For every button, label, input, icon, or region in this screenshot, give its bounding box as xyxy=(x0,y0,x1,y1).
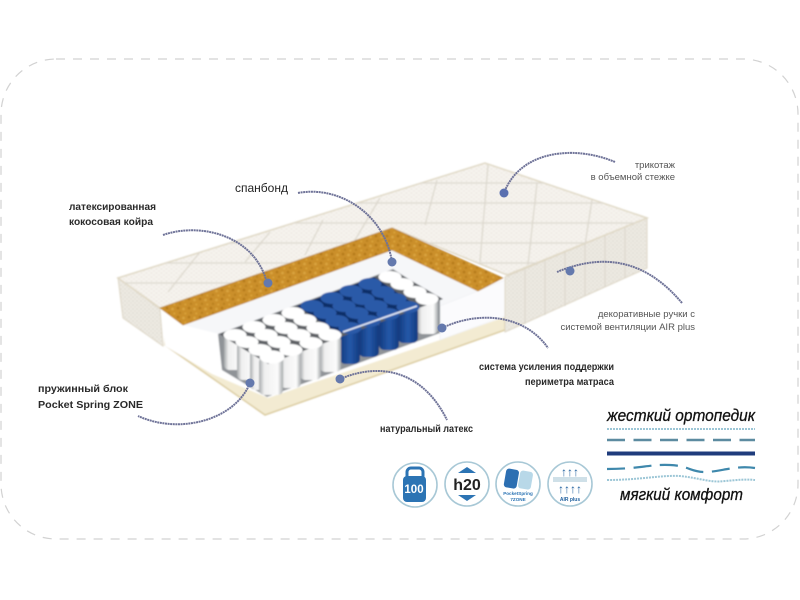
label: latex coir: латексированная xyxy=(69,201,156,213)
icon: pocket spring: PocketSpring xyxy=(503,491,533,496)
front row of springs xyxy=(259,299,438,395)
icon: pocket spring: 7ZONE xyxy=(510,497,526,502)
label: latex coir: кокосовая койра xyxy=(69,216,153,228)
white foam perimeter and interior xyxy=(161,242,505,398)
label: perimeter support: периметра матраса xyxy=(525,377,614,388)
left row of springs xyxy=(224,335,270,390)
foam shading xyxy=(183,250,478,334)
icon: pocket spring xyxy=(496,462,540,506)
spring block top surface xyxy=(219,270,443,364)
spring block frame xyxy=(218,269,440,397)
callout line: handles xyxy=(557,262,682,303)
callout dot: knit xyxy=(500,188,508,198)
heading: firm orthopedic: жесткий ортопедик xyxy=(606,406,756,425)
label: handles: декоративные ручки с xyxy=(598,309,695,320)
callout dot: spunbond xyxy=(388,258,396,266)
line: wavy dashed xyxy=(607,465,755,472)
label: spring block: пружинный блок xyxy=(38,383,129,395)
callout dot: handles xyxy=(566,266,574,276)
label: perimeter support: система усиления поддержки xyxy=(479,362,614,373)
line: wavy dotted xyxy=(607,476,755,481)
coconut coir layer xyxy=(160,228,503,325)
right foam wall xyxy=(440,280,505,340)
pocket spring block xyxy=(218,269,443,397)
label: knit: в объемной стежке xyxy=(591,172,675,183)
callout line: spunbond xyxy=(298,192,392,262)
callout dot: perimeter xyxy=(438,324,446,332)
callout line: knit xyxy=(504,153,615,193)
firmness legend xyxy=(606,406,756,504)
callout dot: coir xyxy=(264,278,272,288)
line: dashed xyxy=(607,439,755,441)
callout line: spring block xyxy=(138,383,250,424)
callout dot: spring block xyxy=(246,378,254,388)
latex base layer xyxy=(165,312,505,415)
icon: air plus: AIR plus xyxy=(560,497,580,503)
blue zone top surface xyxy=(297,277,416,334)
line: solid core xyxy=(607,452,755,456)
callout line: latex xyxy=(340,371,447,420)
dashed rounded frame xyxy=(1,59,798,539)
heading: soft comfort: мягкий комфорт xyxy=(620,485,743,504)
callout line: coir xyxy=(163,230,267,283)
callout line: perimeter xyxy=(442,318,548,348)
icon: air plus: ↑↑↑ xyxy=(561,465,579,479)
label: knit xyxy=(591,160,676,183)
callout dot: latex xyxy=(336,374,344,384)
icon: air plus: ↑↑↑↑ xyxy=(558,482,582,496)
white spring tops xyxy=(224,271,438,364)
label: handles xyxy=(560,309,695,333)
mattress side panel xyxy=(505,218,647,332)
label: latex coir xyxy=(69,201,156,228)
label: perimeter support xyxy=(479,362,614,388)
icon: air plus xyxy=(548,462,592,506)
icon: height 20 cm: h20 xyxy=(453,477,481,494)
label: spring block xyxy=(38,383,143,411)
mattress left side panel xyxy=(118,278,163,346)
mattress cutaway illustration xyxy=(100,163,660,415)
icon: 100 kg load: 100 xyxy=(404,484,424,496)
icon: 100 kg load xyxy=(393,463,437,507)
label: natural latex: натуральный латекс xyxy=(380,424,473,435)
line: dotted top xyxy=(607,428,755,430)
label: handles: системой вентиляции AIR plus xyxy=(560,322,695,333)
label: knit: трикотаж xyxy=(635,160,676,171)
white highlight line over blue zone xyxy=(343,306,417,332)
blue spring tops xyxy=(300,278,420,334)
label: spring block: Pocket Spring ZONE xyxy=(38,399,143,411)
quilted knit top xyxy=(100,163,660,308)
icon: height 20 cm xyxy=(445,462,489,506)
side panel ribs xyxy=(525,228,625,324)
label: spunbond: спанбонд xyxy=(235,181,288,195)
